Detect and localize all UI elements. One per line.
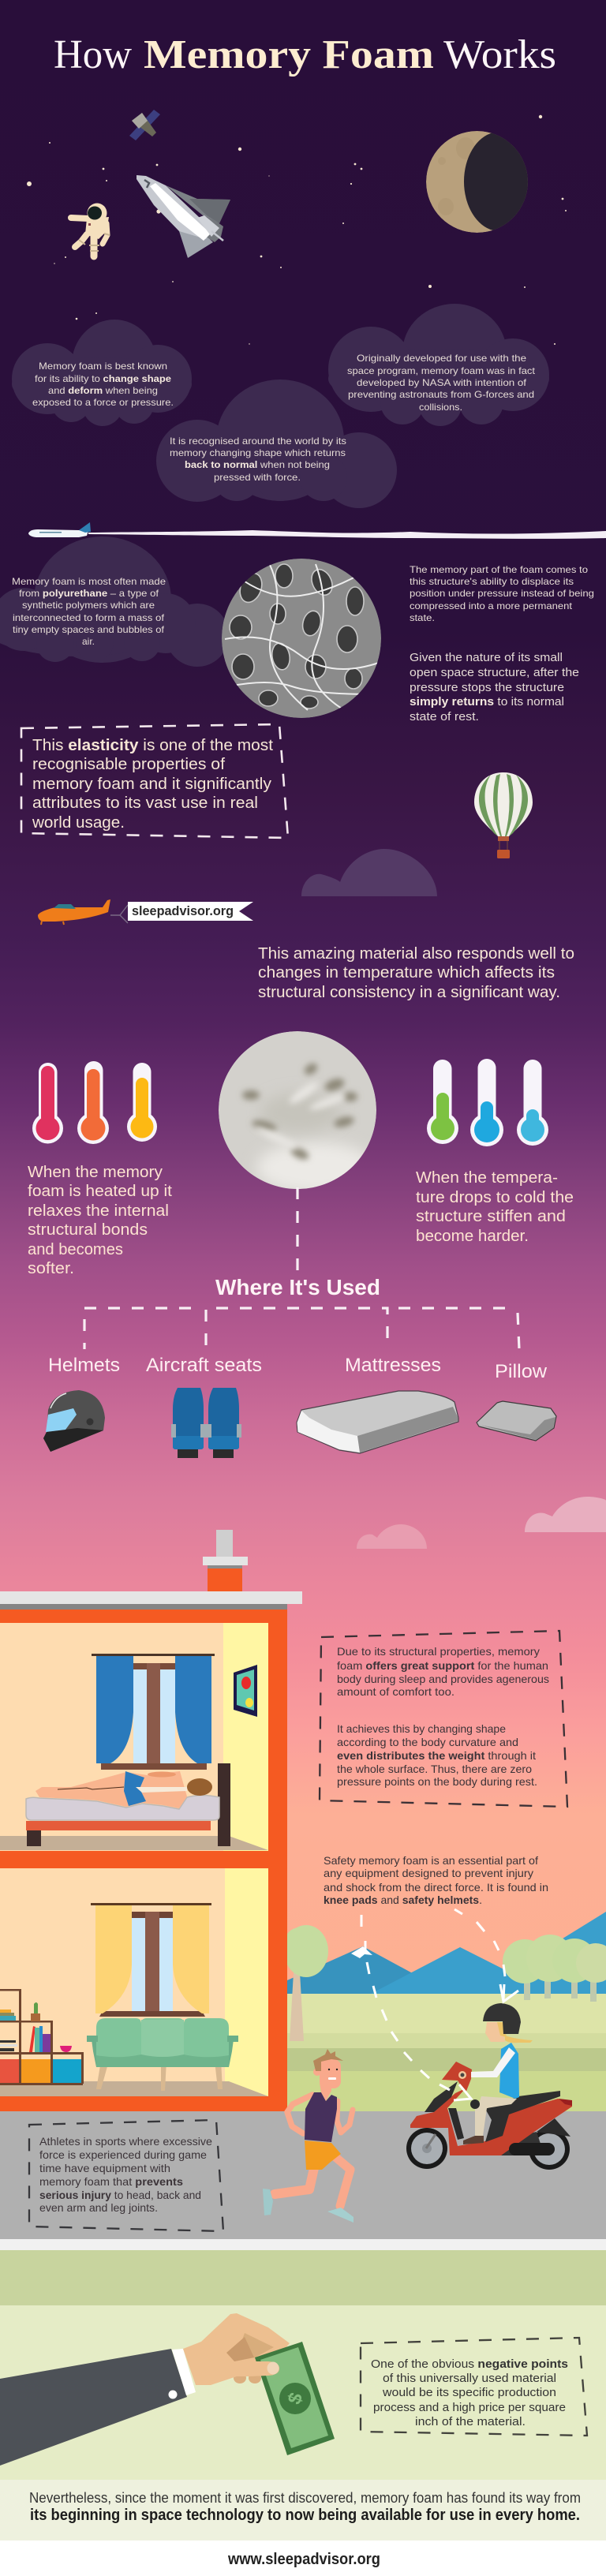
front wheel [406, 2128, 447, 2169]
title: Memory Foam [144, 32, 434, 77]
hand print in foam [219, 1031, 376, 1193]
callout: elasticity: This elasticity is one of the most [32, 737, 273, 754]
callout: negative points: process and a high price per square [373, 2401, 566, 2414]
pink clouds [357, 1497, 606, 1549]
callout: bed support: It achieves this by changing shape [337, 1722, 506, 1735]
cloud with text: back to normal: pressed with force. [214, 472, 301, 483]
text: heated: relaxes the internal [28, 1202, 169, 1220]
text: heated: When the memory [28, 1164, 163, 1181]
window [91, 1903, 211, 2017]
text: safety: knee pads and safety helmets. [324, 1894, 482, 1906]
mountains [287, 1912, 606, 1994]
text: cold: When the tempera- [416, 1169, 558, 1187]
callout: athletes: force is experienced during game [39, 2148, 207, 2161]
title [54, 32, 556, 77]
cloud with text: back to normal: back to normal when not being [185, 459, 330, 470]
icon: hand holding money: $ [283, 2390, 308, 2407]
rear wheel [529, 2129, 570, 2170]
callout: elasticity: attributes to its vast use in real [32, 794, 258, 812]
icon: moon [426, 131, 537, 233]
text: heated: structural bonds [28, 1221, 148, 1239]
labels: uses [48, 1355, 548, 1382]
labels: uses: Pillow [495, 1361, 548, 1382]
callout: athletes: serious injury to head, back and [39, 2189, 201, 2201]
text: small open space structure: pressure stops the structure [410, 682, 564, 694]
cloud with text: polyurethane: from polyurethane – a type of [19, 588, 159, 599]
text: small open space structure [410, 652, 579, 723]
grass [287, 1994, 606, 2112]
text: cold: structure stiffen and [416, 1208, 566, 1225]
callout: negative points: would be its specific production [382, 2386, 556, 2399]
icon: helmet [43, 1390, 105, 1452]
icon: airliner with contrail [28, 522, 606, 539]
cloud with text: polyurethane: air. [82, 636, 95, 647]
text: safety: any equipment designed to prevent injury [324, 1867, 533, 1879]
text: memory part of the foam: The memory part of the foam comes to [410, 564, 588, 575]
text: small open space structure: open space structure, after the [410, 667, 579, 679]
house [0, 1530, 302, 2111]
cloud with text: NASA origin: collisions. [419, 402, 462, 413]
closing text: Nevertheless, since the moment it was first discovered, memory foam has found its way from [29, 2490, 581, 2506]
cloud with text: change shape: for its ability to change shape [35, 373, 171, 384]
callout: bed support: according to the body curvature and [337, 1736, 518, 1748]
text: memory part of the foam [410, 564, 594, 623]
stars [27, 115, 567, 350]
title: How [54, 32, 132, 77]
icon: astronaut [71, 204, 110, 256]
callout: athletes: memory foam that prevents [39, 2175, 183, 2188]
cloud with text: NASA origin [328, 304, 549, 426]
cloud with text: polyurethane: Memory foam is most often made [12, 576, 166, 587]
icon: orange plane with banner [38, 899, 253, 925]
icon: satellite [129, 110, 160, 140]
text: memory part of the foam: state. [410, 612, 435, 623]
cloud with text: polyurethane [0, 537, 229, 667]
room: living room [0, 1868, 268, 2096]
bed with sleeper [26, 1763, 230, 1846]
callout: athletes [29, 2120, 223, 2231]
text: responds to temperature: This amazing material also responds well to [258, 945, 574, 963]
callout: bed support: body during sleep and provides agenerous [337, 1673, 549, 1685]
icon: warm thermometers [32, 1061, 157, 1144]
picture [234, 1665, 257, 1717]
bookshelf [0, 1989, 84, 2085]
cloud with text: change shape: and deform when being [48, 385, 158, 396]
cloud with text: polyurethane: interconnected to form a mass of [13, 612, 165, 623]
trees [284, 1925, 606, 2041]
callout: athletes: even arm and leg joints. [39, 2201, 158, 2214]
text: memory part of the foam: compressed into a more permanent [410, 600, 573, 611]
small cloud [301, 849, 437, 896]
icon: hot air balloon [474, 772, 533, 858]
text: heated [28, 1164, 172, 1277]
rider [458, 2003, 533, 2144]
dashed connector tree [84, 1187, 519, 1349]
text: responds to temperature [258, 945, 574, 1001]
cloud with text: NASA origin: developed by NASA with intention of [357, 377, 527, 388]
scooter with rider [406, 2003, 572, 2170]
closing text [29, 2490, 581, 2524]
cloud with text: NASA origin: Originally developed for use with the [357, 353, 526, 364]
text: responds to temperature: changes in temperature which affects its [258, 964, 555, 981]
icon: cold thermometers [427, 1059, 548, 1146]
labels: uses: Mattresses [345, 1355, 441, 1376]
text: safety: Safety memory foam is an essential part of [324, 1854, 538, 1867]
text: memory part of the foam: position under pressure instead of being [410, 588, 594, 599]
cloud with text: NASA origin: space program, memory foam was in fact [347, 365, 536, 376]
text: small open space structure: state of rest. [410, 711, 479, 723]
cloud with text: polyurethane: synthetic polymers which are [22, 600, 155, 611]
callout: bed support: Due to its structural properties, memory [337, 1645, 540, 1658]
callout: athletes: Athletes in sports where excessive [39, 2135, 212, 2148]
window [92, 1654, 215, 1770]
runner [263, 2049, 354, 2223]
cloud with text: NASA origin: preventing astronauts from G-forces and [348, 389, 534, 400]
callout: elasticity [21, 724, 288, 838]
chimney [203, 1530, 248, 1591]
callout: bed support: pressure points on the body during rest. [337, 1775, 537, 1788]
callout: bed support [320, 1631, 567, 1807]
callout: elasticity: recognisable properties of [32, 756, 225, 773]
icon: hand holding money [0, 2313, 335, 2466]
text: cold: ture drops to cold the [416, 1189, 574, 1206]
text: cold [416, 1169, 574, 1245]
cloud with text: polyurethane: tiny empty spaces and bubbles of [13, 624, 165, 635]
foam microscope photo [222, 559, 381, 718]
text: heated: foam is heated up it [28, 1183, 172, 1200]
cloud with text: change shape: Memory foam is best known [39, 361, 167, 372]
icon: space shuttle [137, 175, 230, 258]
footer url: www.sleepadvisor.org [227, 2551, 380, 2568]
text: safety [324, 1854, 548, 1906]
text: small open space structure: Given the nature of its small [410, 652, 563, 664]
callout: athletes: time have equipment with [39, 2162, 170, 2174]
icon: pillow [477, 1401, 556, 1441]
room: bedroom [0, 1623, 287, 1868]
icon: aircraft seats [171, 1388, 241, 1458]
text: small open space structure: simply returns to its normal [410, 696, 564, 708]
icon: mattress [297, 1391, 458, 1453]
cloud with text: back to normal: It is recognised around the world by its [170, 436, 346, 447]
icon: orange plane with banner: sleepadvisor.org [132, 903, 234, 918]
cloud with text: back to normal: memory changing shape which returns [170, 447, 346, 458]
callout: elasticity: world usage. [32, 814, 125, 832]
text: heated: softer. [28, 1260, 74, 1277]
callout: bed support: amount of comfort too. [337, 1685, 454, 1698]
callout: negative points: of this universally used material [383, 2372, 556, 2385]
sofa [87, 2018, 238, 2091]
callout: negative points: One of the obvious negative points [371, 2357, 568, 2371]
callout: elasticity: memory foam and it significantly [32, 776, 271, 793]
callout: bed support: foam offers great support for the human [337, 1659, 548, 1672]
callout: negative points: inch of the material. [415, 2415, 526, 2428]
labels: uses: Helmets [48, 1355, 120, 1376]
road, stripe and green bands [0, 2111, 606, 2576]
text: responds to temperature: structural consistency in a significant way. [258, 984, 560, 1001]
text: memory part of the foam: this structure's ability to displace its [410, 576, 574, 587]
callout: bed support: the whole surface. Thus, there are zero [337, 1763, 532, 1775]
callout: negative points [361, 2338, 587, 2436]
title: Works [443, 32, 556, 77]
dashed arrows to rider [361, 1909, 518, 2100]
callout: bed support: even distributes the weight through it [337, 1749, 536, 1762]
cloud with text: change shape: exposed to a force or pressure. [32, 397, 174, 408]
labels: uses: Aircraft seats [146, 1355, 262, 1376]
cloud with text: back to normal [156, 379, 397, 508]
text: heated: and becomes [28, 1241, 123, 1258]
cloud with text: change shape [12, 320, 192, 426]
heading: where it's used: Where It's Used [215, 1275, 380, 1299]
text: safety: and shock from the direct force. It is found in [324, 1881, 548, 1894]
text: cold: become harder. [416, 1228, 529, 1245]
